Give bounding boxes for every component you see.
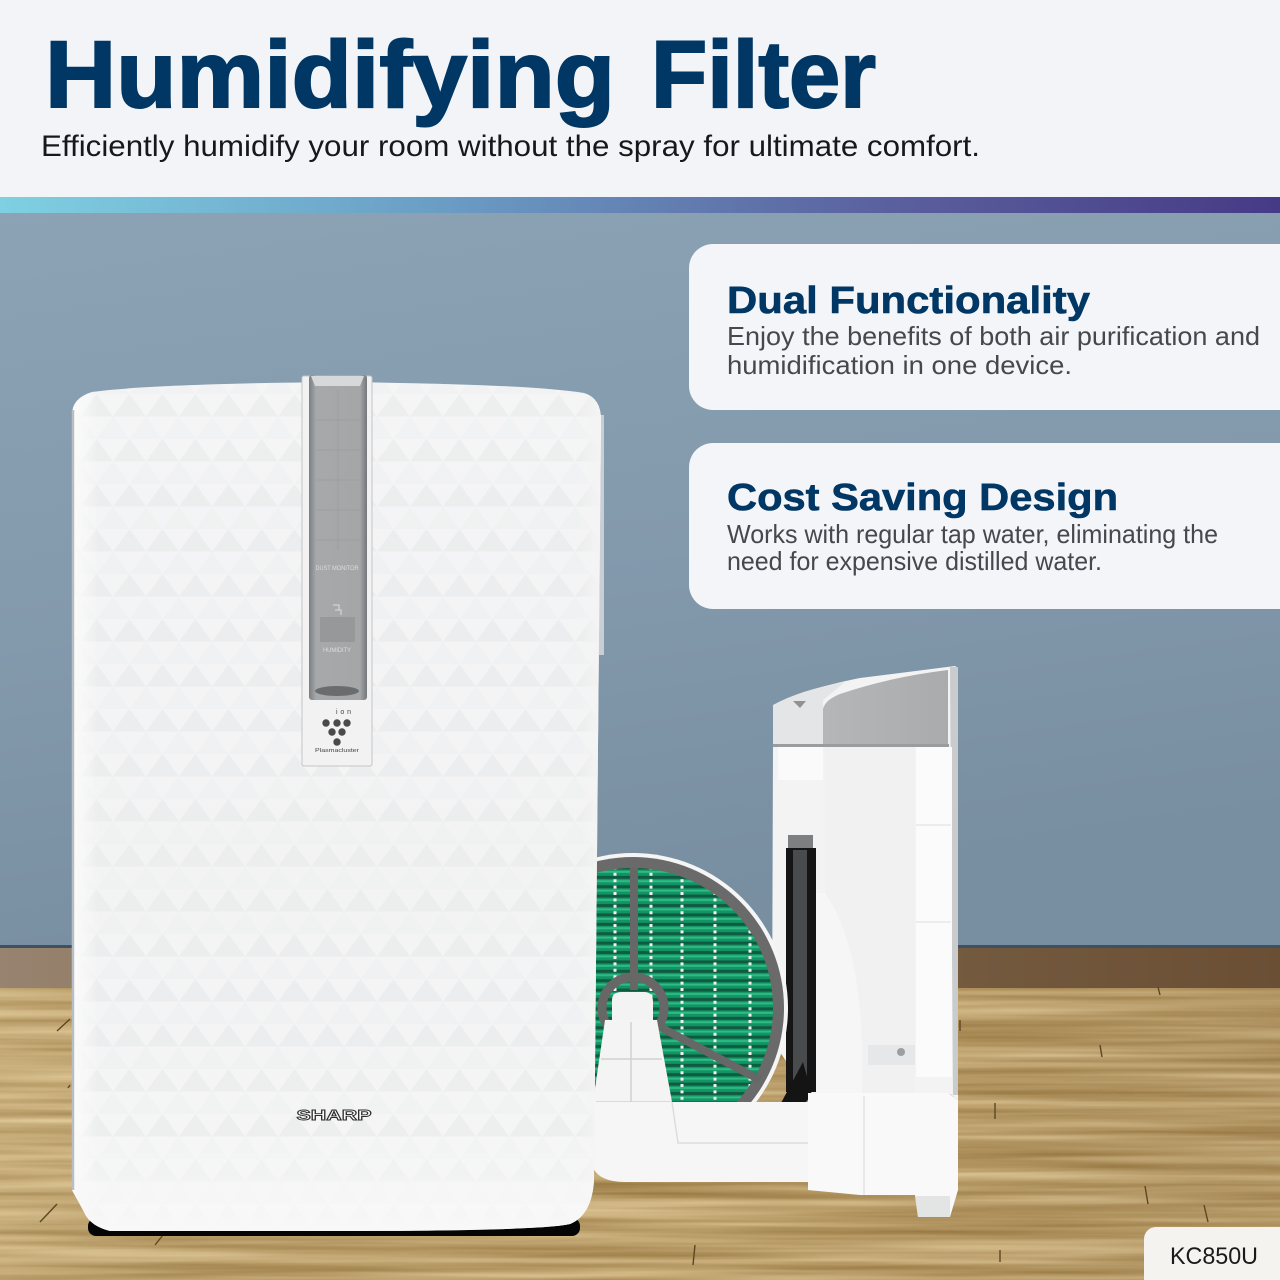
card body: need for expensive distilled water. [727, 546, 1102, 576]
wheel spokes [602, 868, 760, 1080]
model name: KC850U [1170, 1243, 1258, 1270]
card body [727, 321, 1260, 380]
gradient divider bar [0, 197, 1280, 213]
humidifying filter wheel [595, 853, 788, 1102]
back housing [772, 666, 958, 1100]
panel logo: plasmacluster: Plasmacluster [315, 748, 359, 754]
card: cost saving design [689, 443, 1280, 609]
title [45, 22, 876, 128]
card body [727, 519, 1218, 576]
panel label: humidity: HUMIDITY [323, 647, 351, 654]
control panel [302, 375, 372, 766]
subtitle: Efficiently humidify your room without the spray for ultimate comfort. [41, 130, 980, 163]
card heading: Cost Saving Design [727, 477, 1118, 519]
air purifier body [72, 375, 604, 1236]
card body: humidification in one device. [727, 350, 1072, 380]
panel label: dust monitor: DUST MONITOR [316, 565, 359, 572]
title: Filter [651, 22, 876, 128]
black slot [781, 835, 816, 1103]
filter unit pulled out [594, 666, 958, 1217]
brand logo: SHARP [296, 1108, 372, 1124]
icon: plasmacluster dots [322, 719, 351, 746]
panel logo: ion: ion [336, 709, 351, 716]
title: Humidifying [45, 22, 615, 128]
model tag [1144, 1227, 1280, 1280]
card: dual functionality [689, 244, 1280, 410]
tray [593, 1020, 958, 1217]
wheel hub cap [612, 992, 653, 1020]
card heading: Dual Functionality [727, 280, 1090, 322]
icon: tap [333, 605, 341, 615]
header panel [0, 0, 1280, 197]
card body: Enjoy the benefits of both air purification and [727, 321, 1260, 351]
card body: Works with regular tap water, eliminating the [727, 519, 1218, 549]
